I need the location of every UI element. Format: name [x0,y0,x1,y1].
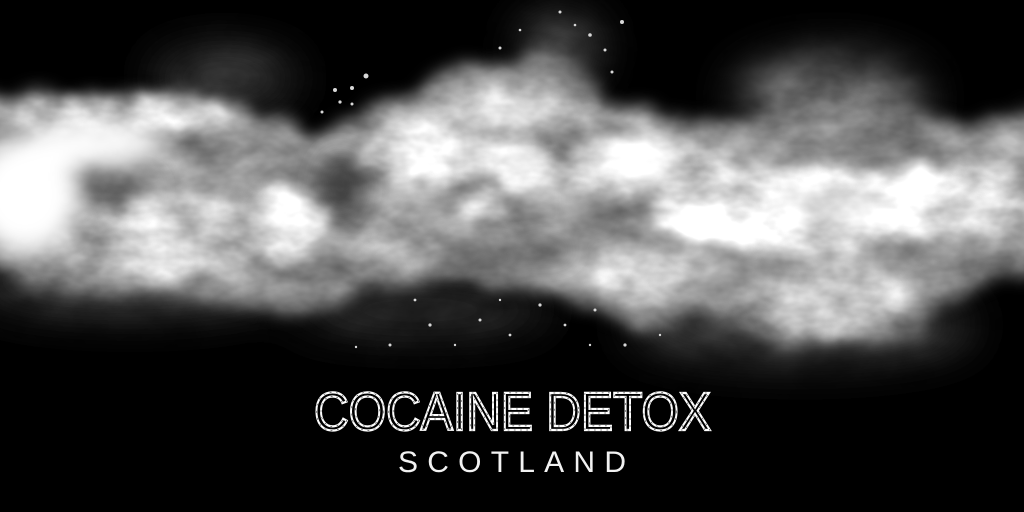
white hot core on the left [0,125,895,253]
title: COCAINE DETOX: COCAINE DETOX [314,382,711,442]
bright smoke highlights [10,83,1024,335]
faint haze behind the cloud [0,20,970,355]
mid grey smoke body [0,60,1024,345]
subtitle: SCOTLAND: SCOTLAND [398,446,626,479]
powder specks [320,10,661,348]
darker pockets [75,151,602,269]
title: COCAINE DETOX: COCAINE DETOX [314,382,711,442]
